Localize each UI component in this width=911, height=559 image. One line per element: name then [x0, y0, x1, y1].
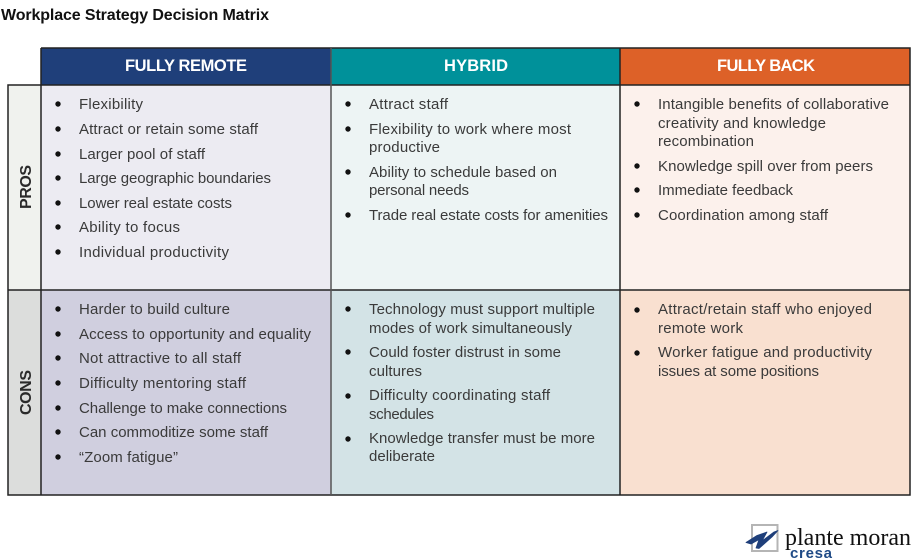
panel: hybrid pros: productive [369, 139, 440, 156]
panel: fully remote cons: Can commoditize some staff [79, 424, 269, 441]
panel: fully remote pros: Larger pool of staff [79, 146, 206, 163]
column header: fully remote: FULLY REMOTE [125, 57, 247, 75]
panel: fully remote cons: Not attractive to all staff [79, 350, 242, 367]
row label: pros [8, 85, 41, 290]
logo: plante moran cresa [746, 525, 911, 559]
decision matrix [8, 48, 910, 495]
panel: fully back pros: Intangible benefits of collaborative [658, 96, 889, 113]
panel: fully back pros: Immediate feedback [658, 182, 794, 199]
panel: fully remote cons [41, 290, 331, 495]
panel: fully back cons: issues at some positions [658, 363, 819, 380]
panel: hybrid cons: deliberate [369, 448, 435, 465]
panel: fully remote pros: Flexibility [79, 96, 144, 113]
panel: fully back pros: creativity and knowledge [658, 115, 826, 132]
title: Workplace Strategy Decision Matrix [1, 7, 269, 24]
panel: hybrid pros: Flexibility to work where most [369, 121, 572, 138]
panel: fully remote pros: Ability to focus [79, 219, 180, 236]
panel: fully back pros: recombination [658, 133, 754, 150]
panel: fully back cons: Attract/retain staff who enjoyed [658, 301, 872, 318]
panel: fully back cons: remote work [658, 320, 744, 337]
panel: fully remote cons: Difficulty mentoring staff [79, 375, 247, 392]
panel: fully back pros: Coordination among staff [658, 207, 829, 224]
panel: fully back pros: Knowledge spill over from peers [658, 158, 873, 175]
row label: cons: CONS [18, 370, 35, 415]
panel: hybrid cons: Technology must support multiple [369, 301, 595, 318]
panel: hybrid pros: Trade real estate costs for amenities [369, 207, 608, 224]
panel: fully remote cons: “Zoom fatigue” [79, 449, 178, 466]
column header: hybrid [331, 48, 620, 85]
panel: fully remote cons: Challenge to make connections [79, 400, 287, 417]
panel: hybrid cons: modes of work simultaneously [369, 320, 572, 337]
column header: hybrid: HYBRID [444, 57, 508, 75]
panel: fully back cons [620, 290, 910, 495]
panel: fully remote pros: Lower real estate costs [79, 195, 232, 212]
panel: fully remote cons: Harder to build culture [79, 301, 230, 318]
column header: fully remote [41, 48, 331, 85]
column header: fully back [620, 48, 910, 85]
grid lines [8, 48, 910, 495]
panel: fully remote pros: Attract or retain some staff [79, 121, 259, 138]
panel: fully remote pros [41, 85, 331, 290]
panel: hybrid cons: Knowledge transfer must be more [369, 430, 595, 447]
panel: hybrid pros: personal needs [369, 182, 469, 199]
panel: hybrid cons: cultures [369, 363, 422, 380]
panel: fully remote cons: Access to opportunity and equality [79, 326, 312, 343]
panel: hybrid cons [331, 290, 620, 495]
panel: fully remote pros: Individual productivity [79, 244, 230, 261]
row label: cons [8, 290, 41, 495]
column header: fully back: FULLY BACK [717, 57, 815, 75]
panel: fully back cons: Worker fatigue and productivity [658, 344, 872, 361]
panel: fully remote pros: Large geographic boundaries [79, 170, 271, 187]
panel: hybrid cons: schedules [369, 406, 434, 423]
panel: fully back pros [620, 85, 910, 290]
row label: pros: PROS [18, 165, 35, 209]
icon: logo mark [746, 525, 778, 551]
panel: hybrid cons: Difficulty coordinating staff [369, 387, 551, 404]
panel: hybrid pros [331, 85, 620, 290]
panel: hybrid pros: Attract staff [369, 96, 449, 113]
panel: hybrid cons: Could foster distrust in some [369, 344, 561, 361]
logo: plante moran cresa: plante moran [785, 525, 911, 551]
panel: hybrid pros: Ability to schedule based on [369, 164, 557, 181]
